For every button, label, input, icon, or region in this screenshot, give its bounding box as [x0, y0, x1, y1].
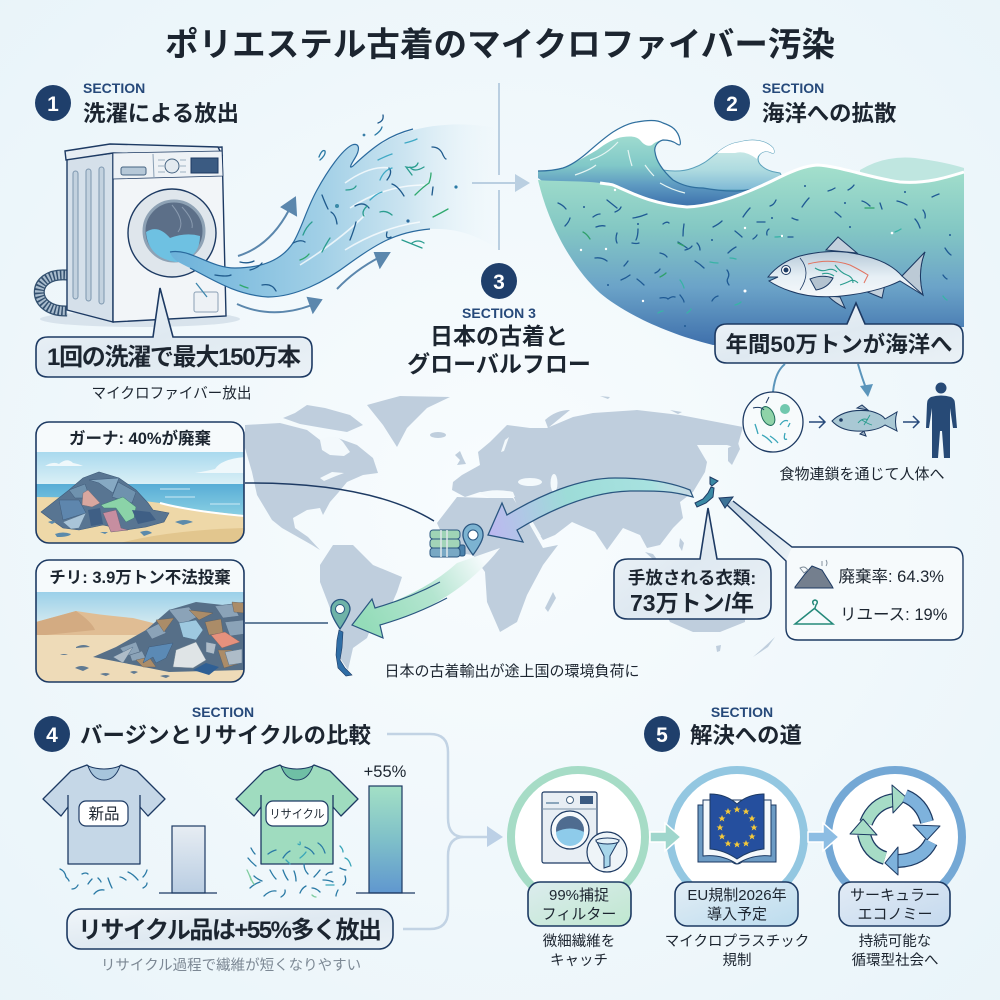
food chain	[743, 364, 957, 458]
title: ポリエステル古着のマイクロファイバー汚染	[165, 27, 835, 64]
icon: recycle arrows	[850, 785, 940, 875]
section 5 heading: 5	[656, 724, 668, 747]
panel: section 1 washing release	[35, 80, 500, 402]
solution: EU regulation: マイクロプラスチック	[665, 933, 809, 950]
section 5 heading: 解決への道	[690, 723, 802, 748]
section 5 heading	[644, 704, 802, 752]
section 1 heading	[35, 80, 239, 126]
stat box: disposal and reuse: 廃棄率: 64.3%	[838, 567, 944, 586]
panel: section 2 ocean spread	[538, 80, 964, 483]
bar: recycled +55%	[356, 763, 415, 893]
callout: discarded clothing 730k tons	[614, 508, 771, 619]
callout: 1.5 million fibers per wash: 1回の洗濯で最大150万本	[47, 344, 301, 371]
section 3 heading: SECTION 3	[462, 305, 536, 321]
icon: bundled clothes	[430, 530, 465, 557]
t-shirt: recycled: リサイクル	[270, 807, 324, 821]
Japan highlight	[695, 477, 718, 507]
callout: discarded clothing 730k tons: 73万トン/年	[630, 590, 754, 616]
caption: exports burden: 日本の古着輸出が途上国の環境負荷に	[384, 663, 640, 680]
card: Chile illegal dumping	[36, 560, 244, 682]
icon: washer with filter	[542, 792, 627, 872]
solution: EU regulation	[665, 770, 809, 969]
section 2 heading	[714, 80, 896, 126]
solution: capture filter: キャッチ	[550, 953, 608, 969]
panel: section 3 Japan and global flow	[36, 263, 963, 682]
icon: plankton circle	[743, 392, 803, 452]
section 2 heading: 海洋への拡散	[762, 101, 896, 126]
icon: EU book	[698, 794, 776, 864]
solution: EU regulation: 導入予定	[707, 906, 767, 923]
panel: section 5 solutions	[511, 704, 962, 969]
callout: recycled releases 55% more	[67, 909, 393, 949]
solution: EU regulation: EU規制2026年	[687, 887, 787, 904]
solution: capture filter: フィルター	[542, 906, 616, 923]
section 1 heading: 洗濯による放出	[83, 101, 239, 126]
card: Ghana 40% discarded: ガーナ: 40%が廃棄	[69, 428, 212, 448]
icon: salmon with fibers inside	[768, 237, 925, 308]
arrow: Africa to Chile	[352, 548, 500, 638]
section 4 heading: SECTION	[192, 704, 254, 720]
section 4 heading: バージンとリサイクルの比較	[80, 723, 371, 748]
solution: capture filter	[511, 770, 645, 969]
section 2 heading: 2	[726, 93, 738, 116]
pin hole Chile	[336, 604, 344, 614]
callout: 500k tons to ocean per year: 年間50万トンが海洋へ	[726, 331, 952, 357]
section 1 heading: 1	[47, 93, 59, 116]
bar: new	[159, 826, 217, 893]
callout: discarded clothing 730k tons: 手放される衣類:	[628, 568, 756, 588]
section 5 heading: SECTION	[711, 704, 773, 720]
connector: section 4 to section 5	[387, 734, 503, 929]
section 3 heading: 日本の古着と	[430, 323, 568, 349]
section 1 heading: SECTION	[83, 80, 145, 96]
arrow: Japan to Africa	[488, 478, 693, 542]
icon: hanger	[795, 600, 833, 624]
caption: via food chain to humans: 食物連鎖を通じて人体へ	[779, 466, 945, 483]
map water cutouts	[320, 436, 558, 537]
solution: circular economy: 循環型社会へ	[852, 952, 938, 969]
section 3 heading: グローバルフロー	[407, 351, 591, 377]
ocean with waves	[538, 121, 964, 345]
icon: washing machine	[39, 144, 240, 327]
fibers from recycled shirt	[247, 842, 351, 897]
caption: microfiber release: マイクロファイバー放出	[92, 385, 251, 402]
t-shirt: recycled	[236, 765, 358, 864]
flow arrows	[237, 198, 389, 312]
card: Ghana 40% discarded	[36, 422, 245, 543]
callout: 1.5 million fibers per wash	[36, 288, 312, 377]
water stream with fibers	[170, 115, 500, 297]
section 4 heading	[34, 704, 371, 752]
solution: capture filter: 微細繊維を	[543, 933, 615, 950]
icon: pin Chile	[331, 600, 350, 629]
panel: section 4 virgin vs recycled	[34, 704, 415, 974]
t-shirt: new	[43, 765, 165, 864]
solution: circular economy: エコノミー	[857, 906, 933, 923]
section 3 heading: 3	[493, 271, 505, 294]
bar: recycled +55%: +55%	[364, 763, 407, 781]
icon: human	[926, 382, 957, 458]
leader lines from cards	[245, 483, 434, 623]
stat box: disposal and reuse	[719, 497, 963, 640]
solution: circular economy: サーキュラー	[850, 887, 940, 904]
solution: circular economy	[828, 770, 962, 969]
icon: small fish	[832, 405, 897, 436]
pin hole Ghana	[468, 530, 478, 540]
decorative connector from section 1 to section 2	[472, 83, 530, 250]
solution: EU regulation: 規制	[722, 952, 752, 969]
solution: capture filter: 99%捕捉	[549, 887, 609, 904]
arrow: EU to circular	[808, 823, 839, 851]
arrow: filter to EU	[650, 823, 681, 851]
section 2 heading: SECTION	[762, 80, 824, 96]
Chile highlight	[336, 630, 352, 676]
t-shirt: new: 新品	[88, 805, 120, 823]
icon: pin Ghana	[463, 524, 483, 555]
card: Chile illegal dumping: チリ: 3.9万トン不法投棄	[49, 567, 231, 587]
section 4 heading: 4	[46, 724, 58, 747]
icon: waste pile	[795, 560, 833, 588]
stat box: disposal and reuse: リユース: 19%	[840, 606, 948, 624]
callout: recycled releases 55% more: リサイクル品は+55%多く放出	[78, 917, 382, 944]
fibers from new shirt	[60, 869, 147, 894]
caption: fibers get shorter: リサイクル過程で繊維が短くなりやすい	[101, 957, 361, 974]
callout: 500k tons to ocean per year	[715, 303, 963, 363]
section 3 heading	[407, 263, 591, 377]
world map	[245, 396, 775, 670]
solution: circular economy: 持続可能な	[859, 933, 931, 950]
